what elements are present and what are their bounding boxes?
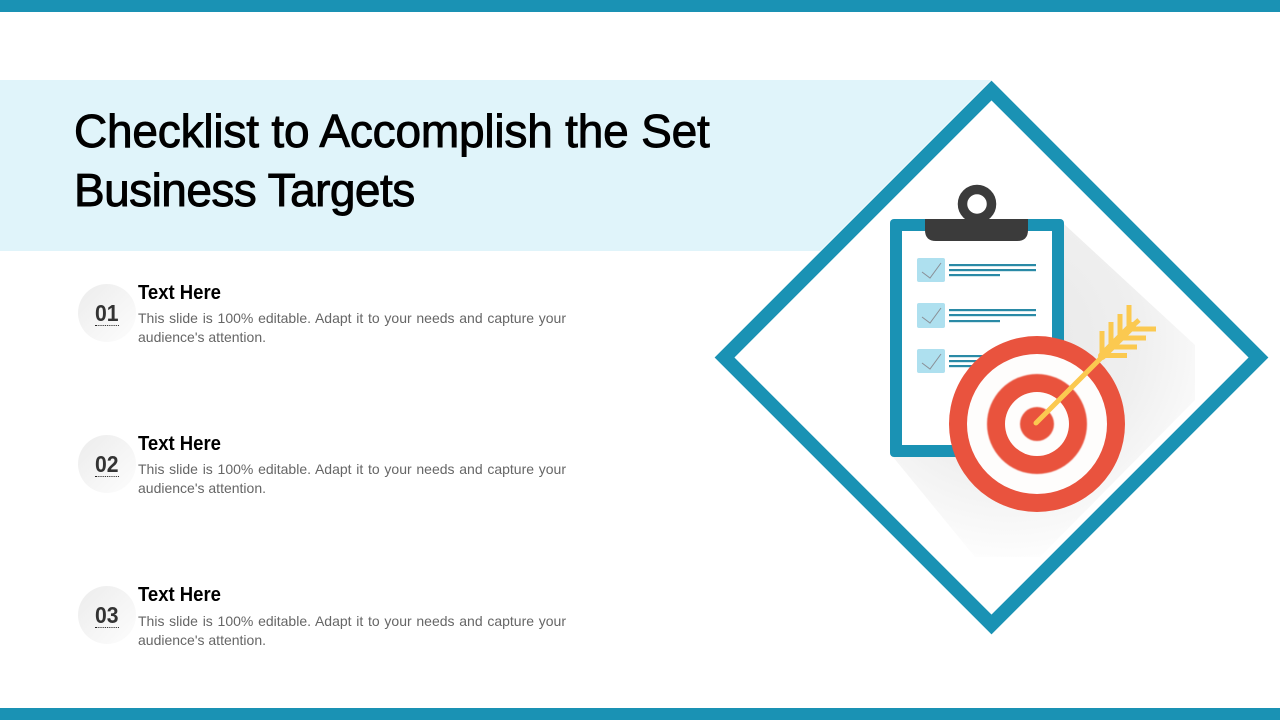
number badge 03	[78, 586, 136, 644]
title: Checklist to Accomplish the Set	[74, 105, 710, 157]
title banner	[0, 80, 992, 251]
item 02	[78, 433, 566, 496]
clip	[925, 219, 1028, 241]
number 03: 03	[95, 602, 119, 628]
heading 03: Text Here	[138, 584, 221, 606]
checklist item 1	[917, 258, 1036, 282]
checklist item 2	[917, 303, 1036, 328]
icon: target	[949, 336, 1125, 512]
diamond frame	[724, 90, 1258, 624]
long shadow	[893, 224, 1195, 557]
title	[74, 105, 710, 216]
top bar	[0, 0, 1280, 12]
icon: clipboard	[890, 190, 1064, 457]
heading 01: Text Here	[138, 282, 221, 304]
clip ring	[962, 190, 992, 218]
bottom bar	[0, 708, 1280, 720]
number 02: 02	[95, 450, 119, 476]
item 03	[78, 584, 566, 648]
icon: arrow	[1036, 305, 1156, 423]
item 01	[78, 282, 566, 345]
title: Business Targets	[74, 164, 415, 216]
heading 02: Text Here	[138, 433, 221, 455]
number badge 01	[78, 284, 136, 342]
body text 01: This slide is 100% editable. Adapt it to your needs and capture your audience's attention.	[138, 310, 566, 345]
number badge 02	[78, 435, 136, 493]
body text 02: This slide is 100% editable. Adapt it to your needs and capture your audience's attention.	[138, 461, 566, 496]
checklist item 3	[917, 349, 1036, 373]
number 01: 01	[95, 300, 119, 326]
body text 03: This slide is 100% editable. Adapt it to your needs and capture your audience's attention.	[138, 613, 566, 648]
